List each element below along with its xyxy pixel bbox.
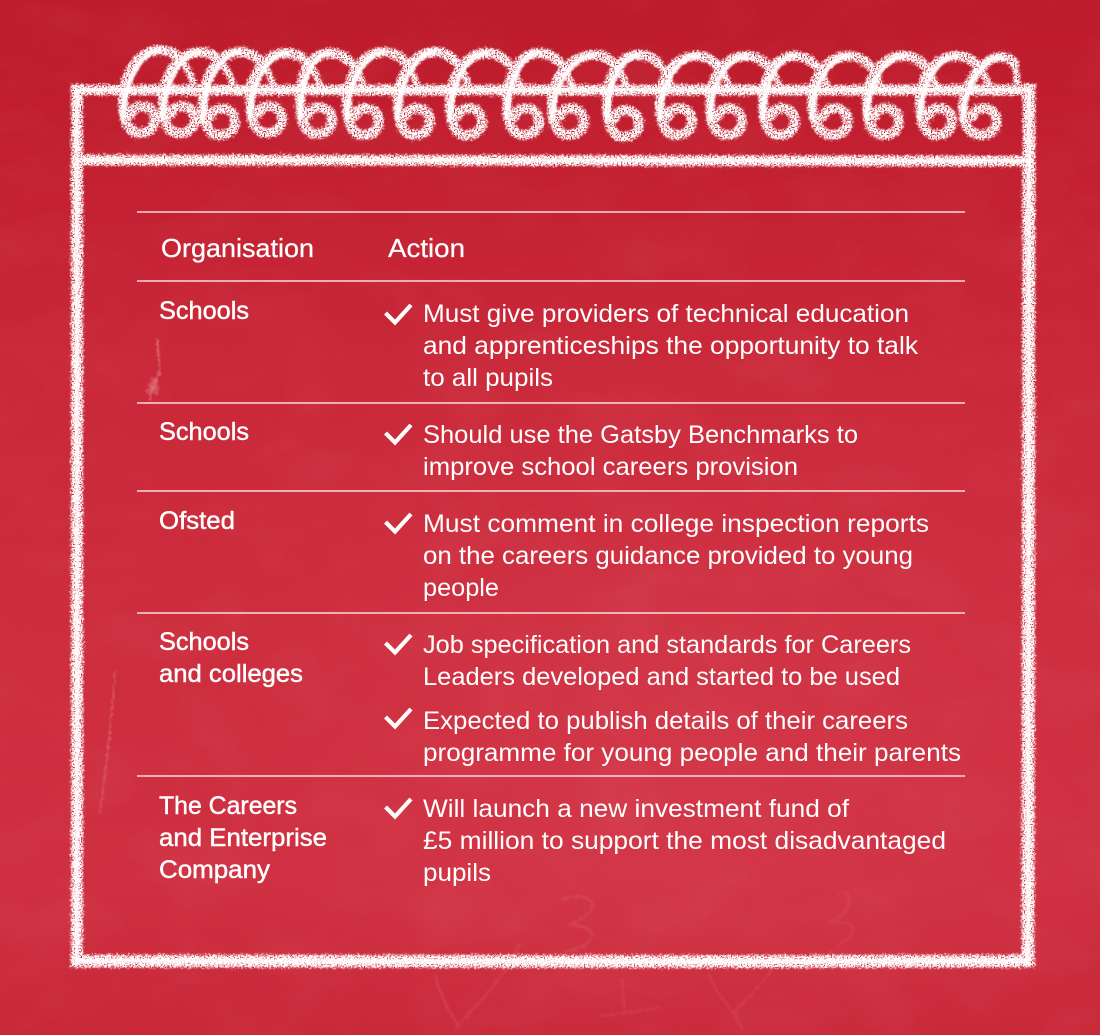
- spiral binding: [123, 50, 1017, 137]
- row: schools, technical education: Must give providers of technical education: [423, 300, 909, 328]
- row: The Careers and Enterprise Company: pupils: [423, 859, 491, 887]
- row: schools, Gatsby Benchmarks: Should use the Gatsby Benchmarks to: [423, 421, 858, 449]
- row: schools and colleges: Leaders developed and started to be used: [423, 663, 900, 691]
- notepad frame: [77, 90, 1030, 962]
- row: Ofsted: [137, 507, 965, 613]
- row: schools, technical education: Schools: [159, 297, 249, 325]
- row: schools, technical education: to all pupils: [423, 364, 553, 392]
- coil trailing ends: [179, 58, 1017, 89]
- row: schools and colleges: [137, 628, 965, 776]
- row: schools and colleges: Schools: [159, 628, 249, 656]
- row: schools, Gatsby Benchmarks: [137, 418, 965, 491]
- table: [137, 212, 965, 887]
- row: The Careers and Enterprise Company: Company: [159, 856, 271, 884]
- table header row: [137, 212, 965, 281]
- row: schools, technical education: and apprenticeships the opportunity to talk: [423, 332, 919, 360]
- row: Ofsted: Ofsted: [159, 507, 235, 535]
- row: schools, Gatsby Benchmarks: improve school careers provision: [423, 453, 798, 481]
- table header row: Action: [388, 233, 465, 263]
- row: schools and colleges: Job specification and standards for Careers: [423, 631, 911, 659]
- row: schools and colleges: Expected to publish details of their careers: [423, 707, 908, 735]
- table header row: Organisation: [161, 233, 314, 263]
- row: The Careers and Enterprise Company: The Careers: [159, 792, 297, 820]
- row: Ofsted: on the careers guidance provided to young: [423, 542, 913, 570]
- coil bright core: [123, 50, 1001, 118]
- row: schools, technical education: [137, 297, 965, 403]
- row: Ofsted: Must comment in college inspection reports: [423, 510, 929, 538]
- row: The Careers and Enterprise Company: [159, 792, 946, 887]
- row: schools and colleges: and colleges: [159, 660, 303, 688]
- row: The Careers and Enterprise Company: £5 million to support the most disadvantaged: [423, 827, 946, 855]
- row: Ofsted: people: [423, 574, 499, 602]
- row: schools and colleges: programme for young people and their parents: [423, 739, 961, 767]
- row: The Careers and Enterprise Company: Will launch a new investment fund of: [423, 795, 849, 823]
- coil arcs and loops: [123, 50, 1014, 137]
- row: schools, Gatsby Benchmarks: Schools: [159, 418, 249, 446]
- faint erased chalk marks: [100, 340, 853, 1030]
- row: The Careers and Enterprise Company: and Enterprise: [159, 824, 327, 852]
